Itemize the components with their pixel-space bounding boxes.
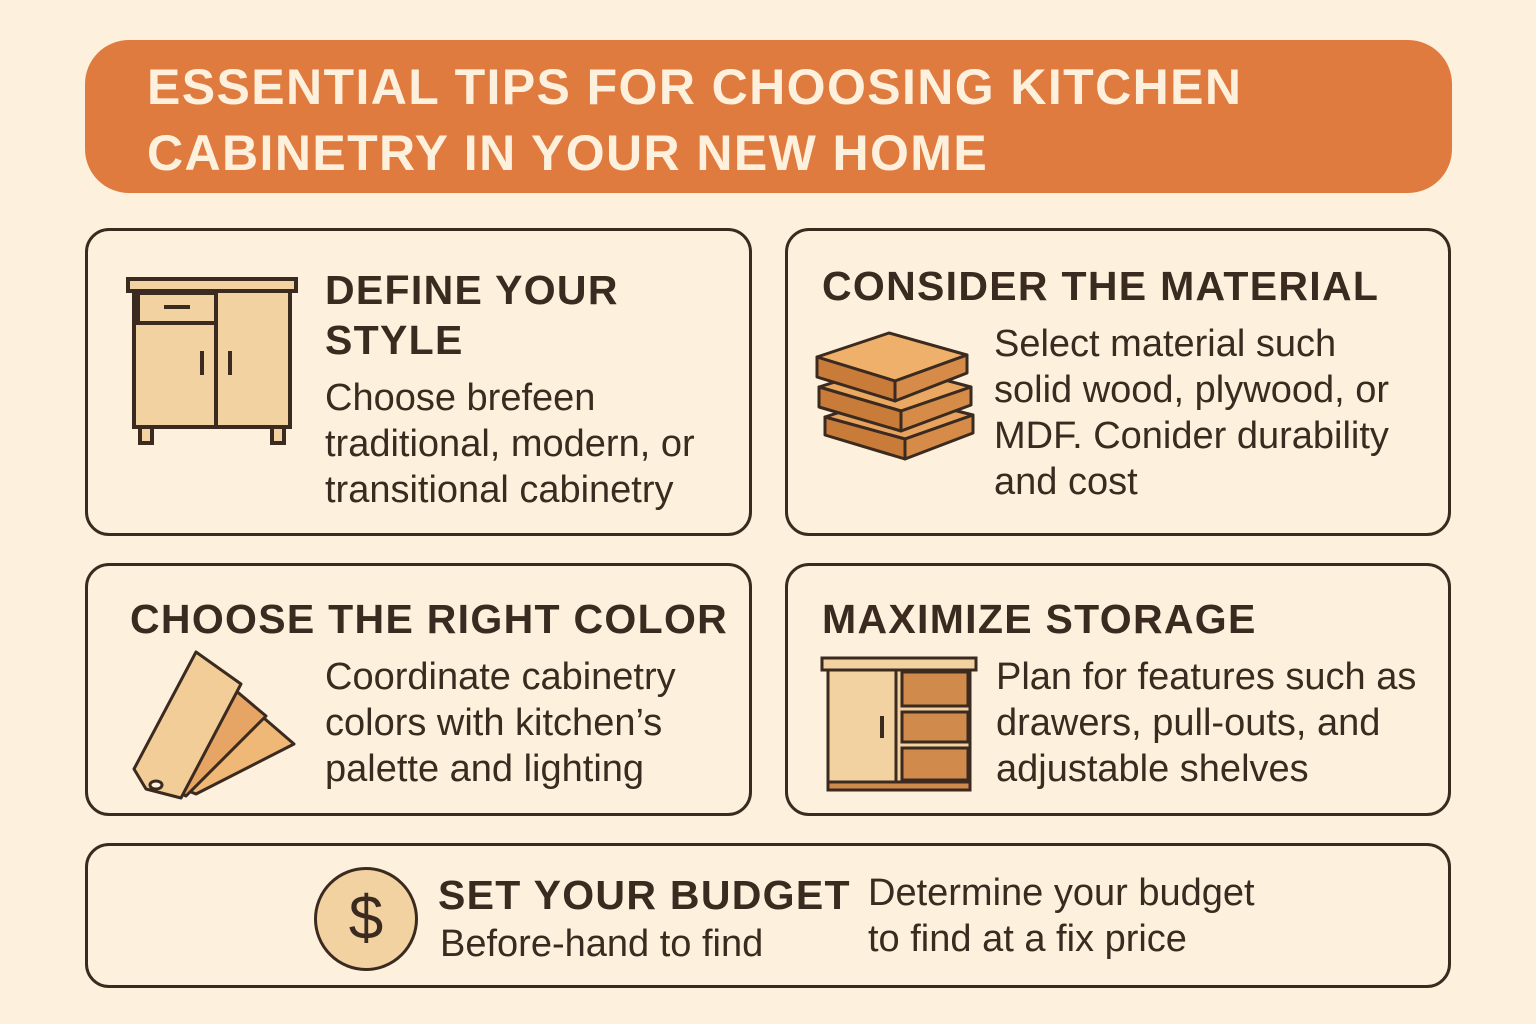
text: Select material such — [994, 323, 1336, 365]
text: transitional cabinetry — [325, 469, 674, 511]
heading: CHOOSE THE RIGHT COLOR — [130, 596, 728, 642]
text: budget detail: to find at a fix price — [868, 918, 1187, 960]
icon: dollar coin: $ — [349, 884, 383, 953]
text: Choose brefeen — [325, 377, 595, 419]
text: Coordinate cabinetry — [325, 656, 676, 698]
icon: cabinet — [126, 277, 298, 445]
heading: STYLE — [325, 317, 464, 363]
panel: set your budget — [85, 843, 1451, 988]
text: budget detail: Determine your budget — [868, 872, 1255, 914]
text: drawers, pull-outs, and — [996, 702, 1380, 744]
title — [147, 59, 1242, 181]
text — [994, 323, 1389, 503]
text: traditional, modern, or — [325, 423, 695, 465]
heading: MAXIMIZE STORAGE — [822, 596, 1257, 642]
panel: choose the right color — [85, 563, 752, 816]
panel: consider the material — [785, 228, 1451, 536]
heading: CONSIDER THE MATERIAL — [822, 263, 1379, 309]
text — [325, 377, 695, 511]
text: solid wood, plywood, or — [994, 369, 1389, 411]
icon: dollar coin — [314, 867, 418, 971]
heading: DEFINE YOUR — [325, 267, 619, 313]
icon: wood planks — [816, 332, 974, 460]
text: budget detail — [868, 872, 1255, 960]
title banner — [85, 40, 1452, 193]
panel: maximize storage — [785, 563, 1451, 816]
icon: storage cabinet — [820, 656, 978, 792]
text: colors with kitchen’s — [325, 702, 662, 744]
title: ESSENTIAL TIPS FOR CHOOSING KITCHEN — [147, 59, 1242, 115]
text — [996, 656, 1416, 790]
heading: SET YOUR BUDGET — [438, 872, 851, 918]
title: CABINETRY IN YOUR NEW HOME — [147, 125, 988, 181]
text: adjustable shelves — [996, 748, 1309, 790]
text — [325, 656, 676, 790]
text: and cost — [994, 461, 1138, 503]
text: palette and lighting — [325, 748, 644, 790]
icon: color swatches — [132, 650, 296, 800]
panel: define your style — [85, 228, 752, 536]
heading — [325, 267, 619, 363]
text: MDF. Conider durability — [994, 415, 1389, 457]
text: Before-hand to find — [440, 923, 763, 965]
text: Plan for features such as — [996, 656, 1416, 698]
